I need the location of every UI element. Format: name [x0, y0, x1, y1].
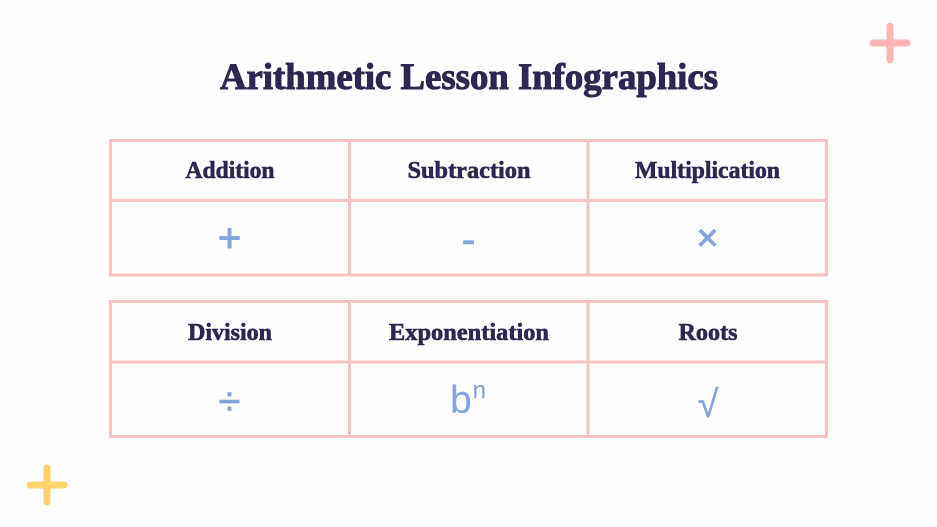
- symbol: b to the n: b: [450, 379, 472, 422]
- heading: Addition: Addition: [186, 158, 274, 184]
- icon: yellow plus: [30, 468, 64, 502]
- symbol: root: √: [698, 384, 719, 426]
- heading: Division: Division: [188, 320, 272, 346]
- heading: Exponentiation: Exponentiation: [389, 320, 549, 346]
- title: Arithmetic Lesson Infographics: [220, 57, 718, 98]
- heading: Roots: Roots: [678, 320, 738, 346]
- icon: pink plus: [873, 26, 907, 60]
- symbol: times: ×: [696, 218, 719, 260]
- symbol: divide: ÷: [219, 380, 240, 424]
- heading: Subtraction: Subtraction: [408, 158, 530, 184]
- table grid: top: [110, 140, 827, 275]
- panel: bottom table: [110, 301, 827, 437]
- panel: top table: [110, 140, 827, 275]
- symbol: minus: -: [462, 216, 476, 262]
- symbol: b to the n: n: [473, 377, 486, 404]
- table grid: bottom: [110, 301, 827, 437]
- symbol: plus: +: [218, 216, 241, 260]
- heading: Multiplication: Multiplication: [635, 158, 780, 184]
